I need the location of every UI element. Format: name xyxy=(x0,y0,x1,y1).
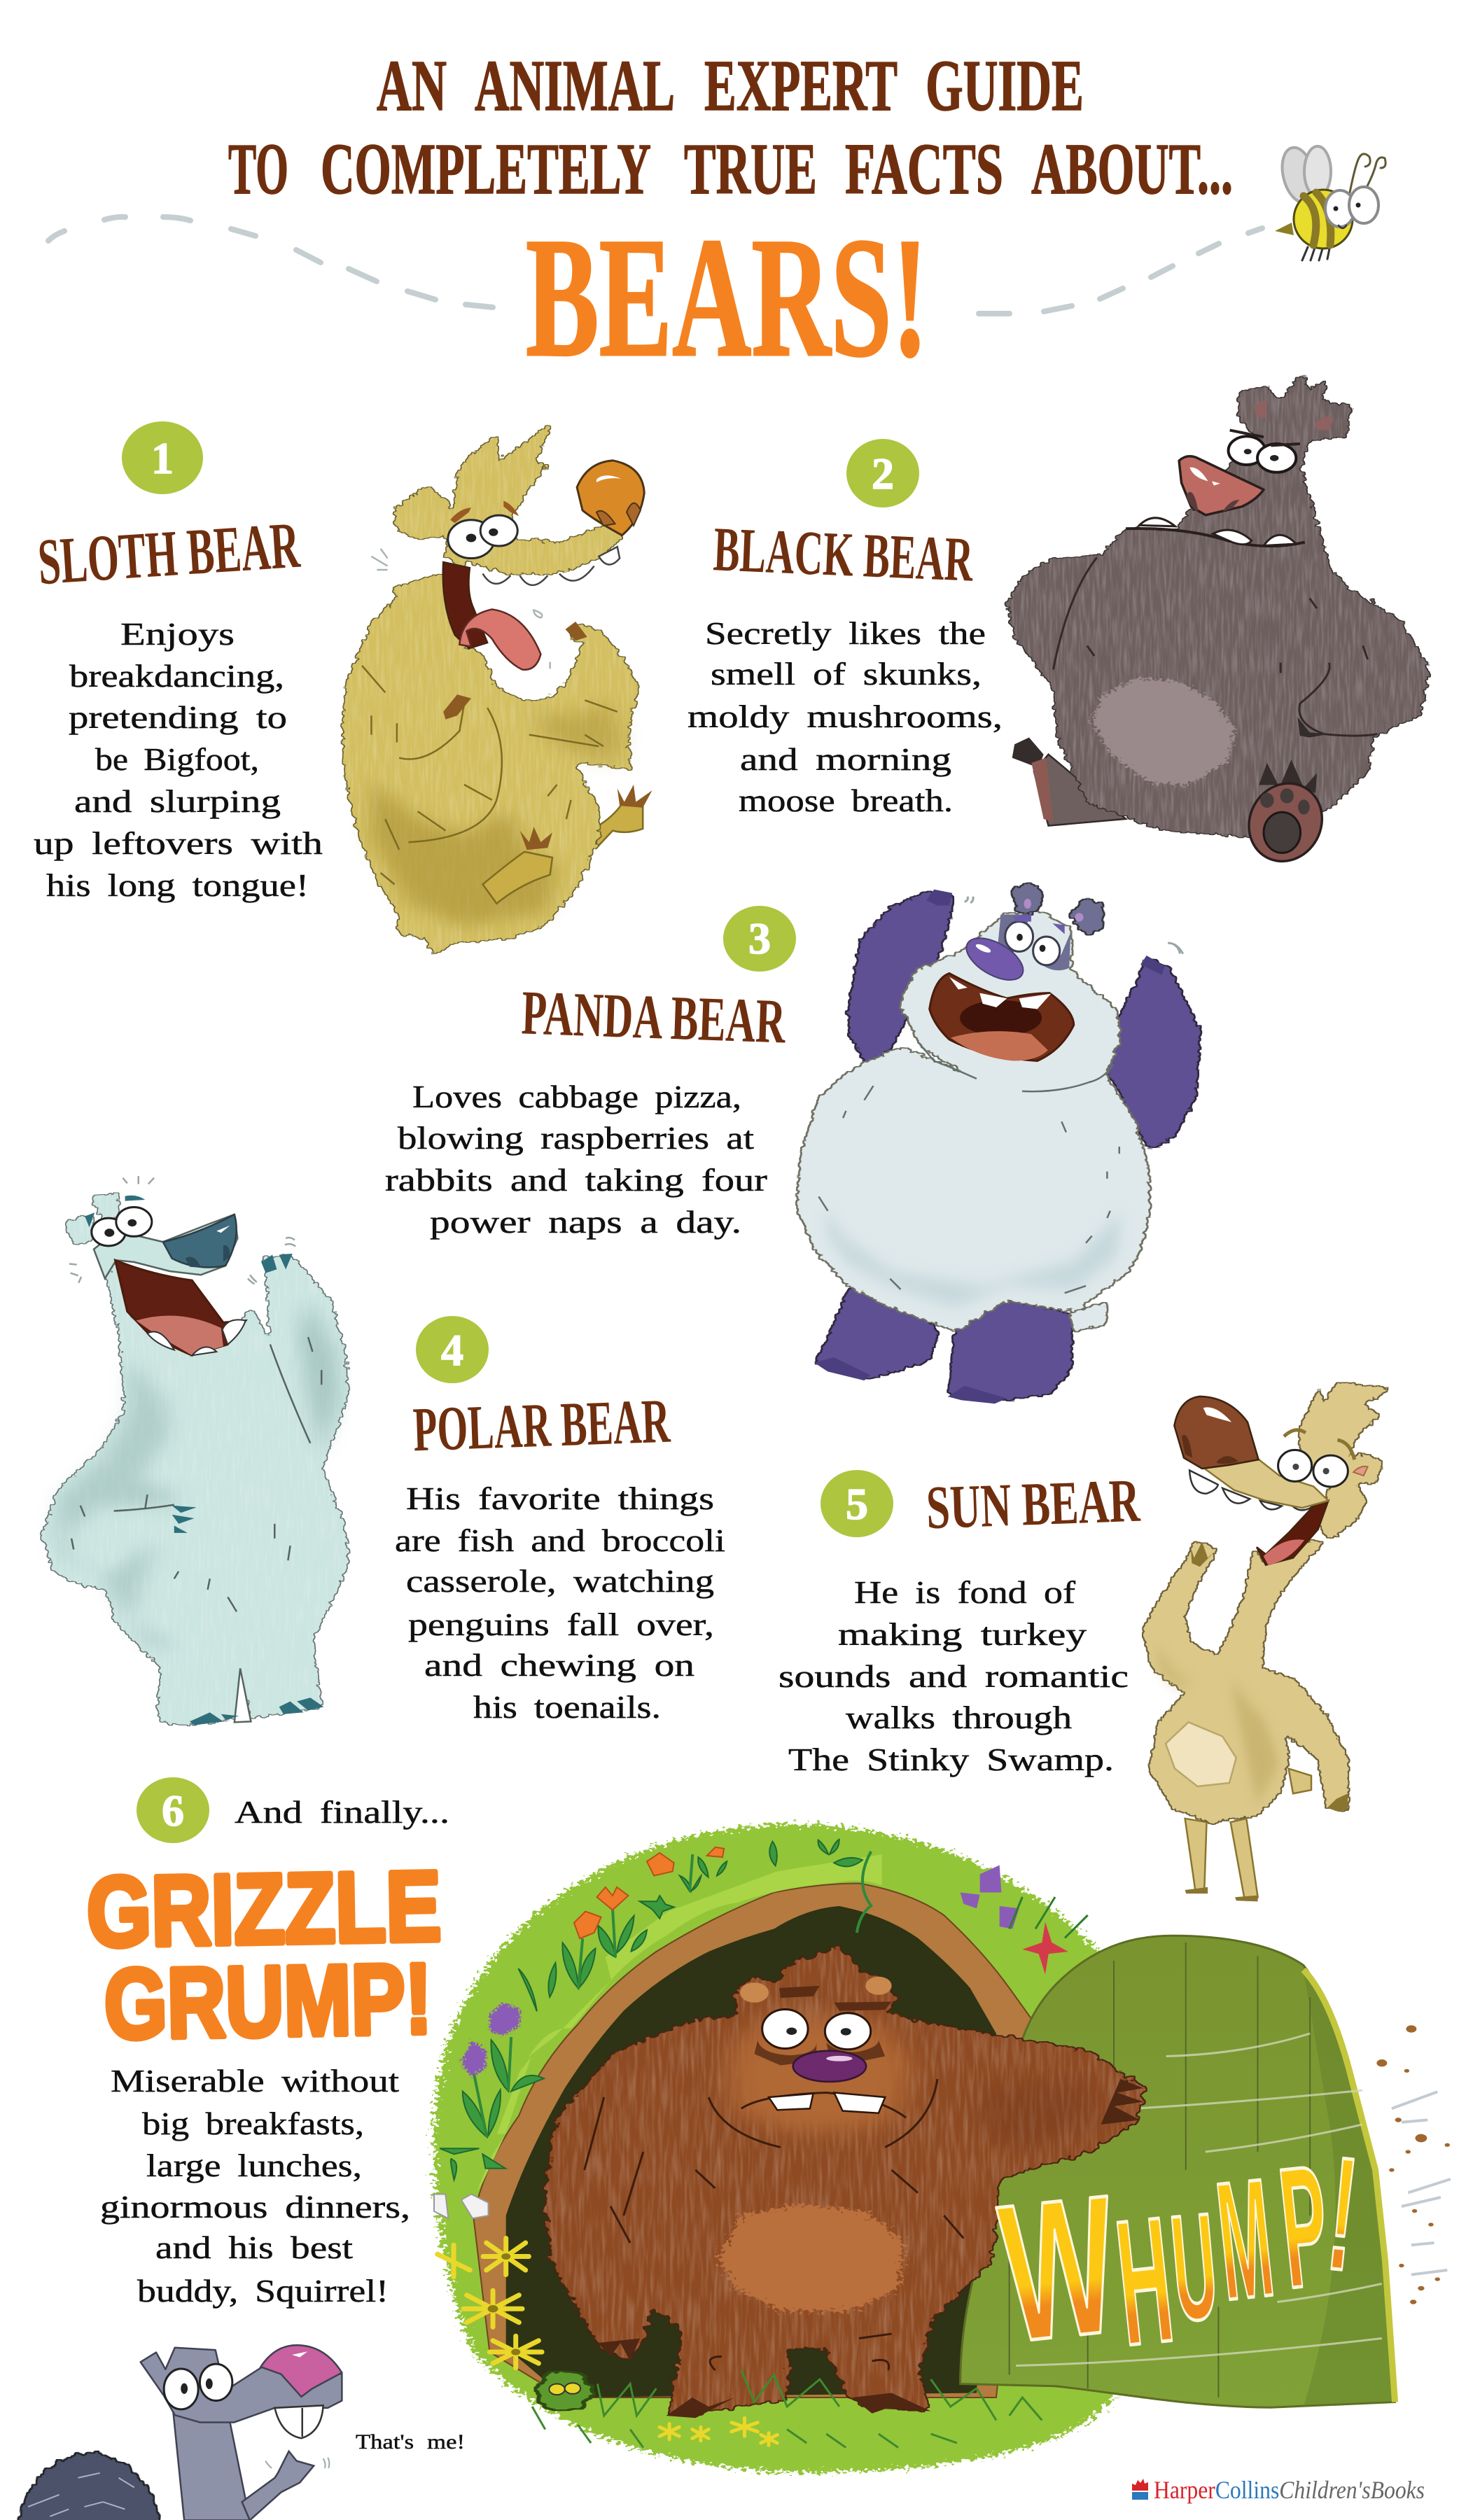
whump lettering: W xyxy=(991,2155,1127,2384)
text: grizzle grump facts: buddy, Squirrel! xyxy=(137,2273,389,2309)
title: ABOUT... xyxy=(1031,129,1233,209)
publisher logo: HarperCollinsChildren'sBooks xyxy=(1154,2476,1425,2504)
badge 3 xyxy=(723,906,796,972)
text: black bear facts: moldy mushrooms, xyxy=(687,699,1003,734)
title: FACTS xyxy=(845,129,1003,209)
text: sloth bear facts: breakdancing, xyxy=(69,658,284,694)
illustration: grizzle grump at his den xyxy=(434,1824,1451,2472)
text: panda bear facts: power naps a day. xyxy=(430,1204,741,1240)
title: TO xyxy=(228,129,288,209)
heading: polar bear: POLAR BEAR xyxy=(412,1387,671,1464)
title: EXPERT xyxy=(704,46,898,126)
text: sloth bear facts: Enjoys xyxy=(120,616,235,652)
heading: grizzle grump xyxy=(86,1851,442,2060)
badge 5 xyxy=(821,1470,893,1537)
text: sloth bear facts: be Bigfoot, xyxy=(95,741,259,777)
badge 6: 6 xyxy=(162,1786,184,1835)
badge 6 xyxy=(137,1777,209,1843)
text: polar bear facts: casserole, watching xyxy=(406,1563,714,1599)
text: sloth bear facts: and slurping xyxy=(74,783,281,819)
text: that's me: That's me! xyxy=(356,2430,465,2454)
illustration: squirrel xyxy=(18,2345,342,2520)
text: sloth bear facts: up leftovers with xyxy=(34,825,323,861)
text: black bear facts: moose breath. xyxy=(739,783,953,818)
text: grizzle grump facts: and his best xyxy=(155,2230,353,2265)
whump lettering: U xyxy=(1165,2181,1223,2353)
text: polar bear facts: penguins fall over, xyxy=(408,1606,714,1642)
text: sloth bear facts xyxy=(34,616,323,903)
illustration: black bear xyxy=(1007,372,1428,864)
badge 3: 3 xyxy=(748,913,771,963)
title: GUIDE xyxy=(926,46,1084,126)
text: black bear facts: Secretly likes the xyxy=(705,615,986,651)
door xyxy=(961,1935,1395,2407)
title: ANIMAL xyxy=(475,46,675,126)
grizzle grump xyxy=(545,1947,1143,2416)
badge 2 xyxy=(846,439,919,507)
title xyxy=(228,46,1233,392)
heading: grizzle grump: GRUMP! xyxy=(104,1943,433,2060)
upper plants on the mound xyxy=(434,1840,882,2218)
heading: black bear: BLACK BEAR xyxy=(712,514,975,595)
title: BEARS! xyxy=(526,202,928,392)
heading: sun bear: SUN BEAR xyxy=(925,1467,1142,1542)
text: sun bear facts: walks through xyxy=(846,1700,1072,1735)
text: grizzle grump facts: ginormous dinners, xyxy=(100,2189,410,2225)
illustration: sun bear xyxy=(1143,1383,1391,1901)
text: sun bear facts: The Stinky Swamp. xyxy=(788,1742,1114,1777)
illustration: polar bear xyxy=(43,1176,348,1725)
badge 1 xyxy=(122,421,203,494)
bee flight path xyxy=(48,217,1262,314)
title: TRUE xyxy=(684,129,817,209)
text: polar bear facts: are fish and broccoli xyxy=(395,1522,725,1558)
text: grizzle grump facts xyxy=(100,2063,410,2309)
whump lettering: M xyxy=(1210,2143,1280,2335)
burrow xyxy=(506,1906,996,2398)
text: black bear facts: smell of skunks, xyxy=(711,656,982,692)
illustration: sloth bear xyxy=(344,422,652,955)
heading: panda bear: PANDA BEAR xyxy=(520,978,787,1057)
badge 4 xyxy=(416,1316,489,1383)
title: AN xyxy=(377,46,447,126)
text: polar bear facts: his toenails. xyxy=(473,1689,661,1725)
icon: bee xyxy=(1275,144,1385,260)
text: sun bear facts: making turkey xyxy=(838,1616,1087,1652)
whump lettering: ! xyxy=(1320,2123,1364,2304)
purple and red flowers on the mound xyxy=(961,1865,1088,1974)
text: polar bear facts: and chewing on xyxy=(424,1647,694,1683)
heading: sloth bear: SLOTH BEAR xyxy=(36,509,302,598)
text: panda bear facts: Loves cabbage pizza, xyxy=(412,1079,741,1114)
text: sun bear facts xyxy=(779,1574,1129,1777)
title: COMPLETELY xyxy=(321,129,651,209)
whump lettering xyxy=(991,2123,1364,2384)
text: panda bear facts: rabbits and taking four xyxy=(385,1162,767,1198)
whump lettering: P xyxy=(1272,2129,1336,2324)
heading: grizzle grump: GRIZZLE xyxy=(86,1851,442,1968)
text: panda bear facts: blowing raspberries at xyxy=(398,1120,754,1156)
flying debris xyxy=(1376,2025,1450,2304)
yellow flowers xyxy=(438,2239,777,2445)
text: panda bear facts xyxy=(385,1079,767,1240)
text: polar bear facts xyxy=(395,1480,725,1725)
badge 5: 5 xyxy=(846,1479,868,1529)
text: and finally: And finally... xyxy=(235,1794,449,1830)
text: sloth bear facts: pretending to xyxy=(69,699,287,735)
text: black bear facts xyxy=(687,615,1003,818)
badge 2: 2 xyxy=(872,449,894,498)
whump lettering: H xyxy=(1108,2180,1181,2384)
text: sun bear facts: He is fond of xyxy=(854,1574,1076,1610)
dirt rim xyxy=(473,1883,1035,2398)
text: sun bear facts: sounds and romantic xyxy=(779,1658,1129,1694)
illustration: panda bear xyxy=(797,882,1200,1404)
grass mound xyxy=(434,1824,1127,2472)
badge 1: 1 xyxy=(151,433,174,483)
text: grizzle grump facts: large lunches, xyxy=(146,2148,362,2183)
hidden creature xyxy=(540,2370,589,2411)
text: grizzle grump facts: big breakfasts, xyxy=(142,2106,364,2141)
text: polar bear facts: His favorite things xyxy=(406,1480,714,1516)
badge 4: 4 xyxy=(441,1325,463,1375)
text: black bear facts: and morning xyxy=(740,741,951,777)
text: grizzle grump facts: Miserable without xyxy=(111,2063,399,2099)
text: sloth bear facts: his long tongue! xyxy=(46,867,309,903)
